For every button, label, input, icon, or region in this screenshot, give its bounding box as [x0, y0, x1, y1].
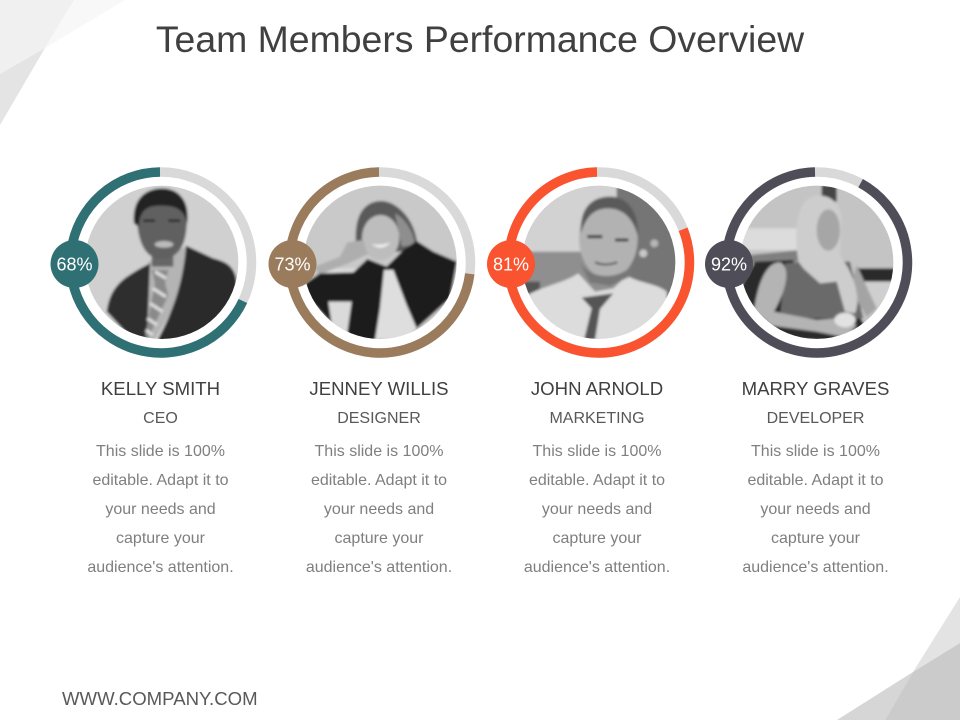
- text block: Marry Graves: your needs and: [760, 501, 871, 518]
- text block: Kelly Smith: your needs and: [105, 501, 216, 518]
- text block: John Arnold: editable. Adapt it to: [529, 472, 665, 489]
- title: Team Members Performance Overview: [156, 18, 804, 60]
- percent badge 73%: 73%: [274, 254, 311, 274]
- percent badge 68%: [50, 240, 98, 288]
- ring progress 92%: [726, 172, 907, 353]
- member card graphic: Marry Graves: [705, 172, 908, 353]
- ring track: [726, 172, 908, 353]
- text block: Jenney Willis: JENNEY WILLIS: [309, 378, 449, 399]
- ring track: [70, 172, 252, 353]
- member card graphic: John Arnold: [487, 172, 690, 353]
- background shapes: bottom right: [837, 597, 960, 720]
- ring progress 68%: [71, 172, 243, 353]
- photo: Jenney Willis: [306, 186, 457, 339]
- text block: Marry Graves: audience's attention.: [742, 559, 889, 576]
- text block: John Arnold: MARKETING: [549, 410, 645, 427]
- text block: John Arnold: [524, 378, 670, 576]
- member card graphic: Jenney Willis: [268, 172, 470, 353]
- ring track: [508, 172, 690, 353]
- background shapes: top left: [0, 0, 125, 125]
- percent badge 81%: [487, 240, 535, 288]
- text block: John Arnold: JOHN ARNOLD: [531, 378, 663, 399]
- text block: John Arnold: audience's attention.: [524, 559, 670, 576]
- text block: Kelly Smith: editable. Adapt it to: [92, 472, 229, 489]
- percent badge 92%: 92%: [711, 254, 747, 274]
- text block: Jenney Willis: audience's attention.: [306, 559, 452, 576]
- text block: Kelly Smith: CEO: [143, 410, 178, 427]
- text block: John Arnold: This slide is 100%: [533, 443, 661, 460]
- text block: Marry Graves: capture your: [771, 530, 860, 547]
- ring track: [290, 172, 470, 353]
- member card graphic: Kelly Smith: [50, 172, 252, 353]
- text block: Marry Graves: MARRY GRAVES: [742, 378, 889, 399]
- text block: Marry Graves: This slide is 100%: [751, 443, 880, 460]
- text block: Marry Graves: DEVELOPER: [767, 410, 864, 427]
- percent badge 68%: 68%: [56, 254, 93, 274]
- text block: Kelly Smith: [87, 378, 234, 576]
- text block: Jenney Willis: capture your: [335, 530, 423, 547]
- text block: Jenney Willis: DESIGNER: [337, 410, 421, 427]
- text block: Marry Graves: [742, 378, 889, 576]
- text block: Jenney Willis: This slide is 100%: [315, 443, 443, 460]
- percent badge 73%: [268, 240, 316, 288]
- text block: John Arnold: capture your: [553, 530, 641, 547]
- ring progress 73%: [290, 172, 470, 353]
- footer website: WWW.COMPANY.COM: [62, 688, 258, 709]
- text block: Jenney Willis: [306, 378, 452, 576]
- text block: Jenney Willis: editable. Adapt it to: [311, 472, 447, 489]
- text block: Kelly Smith: audience's attention.: [87, 559, 234, 576]
- text block: Jenney Willis: your needs and: [324, 501, 434, 518]
- text block: Marry Graves: editable. Adapt it to: [747, 472, 884, 489]
- text block: John Arnold: your needs and: [542, 501, 652, 518]
- percent badge 92%: [705, 240, 753, 288]
- text block: Kelly Smith: capture your: [116, 530, 205, 547]
- text block: Kelly Smith: KELLY SMITH: [101, 378, 220, 399]
- text block: Kelly Smith: This slide is 100%: [96, 443, 225, 460]
- photo: John Arnold: [524, 186, 676, 339]
- ring progress 81%: [508, 172, 689, 353]
- photo: Kelly Smith: [88, 186, 238, 339]
- percent badge 81%: 81%: [493, 254, 529, 274]
- photo: Marry Graves: [742, 186, 894, 339]
